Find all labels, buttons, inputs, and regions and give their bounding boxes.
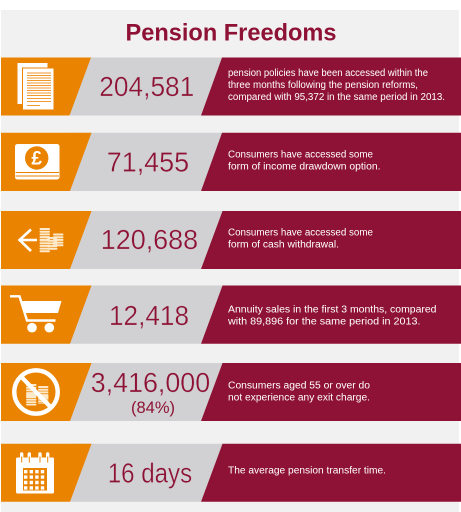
row 4 description — [227, 305, 436, 328]
icon: calendar — [16, 454, 54, 494]
row 6: transfer time — [1, 444, 461, 502]
row 4 maroon panel — [201, 286, 461, 344]
row 4 description: with 89,896 for the same period in 2013. — [227, 317, 420, 328]
row 3: cash withdrawal — [1, 211, 461, 269]
icon: arrow and coins — [20, 228, 64, 252]
row 6 description: The average pension transfer time. — [228, 465, 386, 476]
row 2: income drawdown — [1, 133, 461, 191]
row 5 description: Consumers aged 55 or over do — [228, 381, 370, 392]
row 5 number: 3,416,000 — [91, 367, 210, 398]
row 4: annuity sales — [1, 286, 461, 344]
row 1: policies accessed — [1, 58, 461, 116]
row 6 orange panel — [1, 444, 92, 502]
row 1 orange panel — [1, 58, 91, 116]
row 5 description: not experience any exit charge. — [228, 393, 370, 404]
row 1 grey band — [70, 58, 222, 116]
row 2 orange panel — [1, 133, 92, 191]
row 3 number: 120,688 — [101, 224, 198, 255]
row 5 percentage: (84%) — [131, 399, 175, 417]
row 2 number: 71,455 — [107, 147, 189, 178]
row 2 grey band — [70, 133, 222, 191]
icon: no coins — [14, 370, 58, 414]
title: Pension Freedoms — [126, 20, 336, 47]
row 3 description: Consumers have accessed some — [228, 228, 373, 239]
row 5: no exit charge — [1, 363, 461, 421]
row 5 orange panel — [1, 363, 92, 421]
icon: pound banknotes — [15, 144, 60, 180]
row 1 number: 204,581 — [99, 71, 194, 102]
row 3 maroon panel — [201, 211, 461, 269]
row 5 maroon panel — [201, 363, 461, 421]
row 4 orange panel — [1, 286, 92, 344]
row 1 description: compared with 95,372 in the same period in 2013. — [228, 92, 445, 103]
row 5 grey band — [70, 363, 222, 421]
row 4 description: Annuity sales in the first 3 months, compared — [228, 305, 436, 316]
row 3 grey band — [70, 211, 222, 269]
row 2 description: Consumers have accessed some — [228, 150, 373, 161]
row 2 description — [228, 150, 380, 173]
row 2 description: form of income drawdown option. — [228, 162, 380, 173]
row 6 number: 16 days — [108, 458, 192, 489]
icon: documents — [18, 63, 54, 110]
row 3 description: form of cash withdrawal. — [228, 240, 339, 251]
row 1 description: three months following the pension reforms, — [228, 80, 418, 91]
row 4 grey band — [70, 286, 222, 344]
row 1 description: pension policies have been accessed within the — [228, 68, 428, 79]
icon: pound banknotes: £ — [31, 148, 42, 170]
row 2 maroon panel — [201, 133, 461, 191]
row 6 grey band — [70, 444, 222, 502]
row 5 description — [228, 381, 370, 404]
row 4 number: 12,418 — [109, 300, 189, 331]
row 3 orange panel — [1, 211, 92, 269]
row 3 description — [228, 228, 373, 251]
row 6 maroon panel — [201, 444, 461, 502]
row 1 maroon panel — [201, 58, 461, 116]
icon: shopping cart — [10, 296, 62, 333]
row 1 description — [228, 68, 445, 103]
